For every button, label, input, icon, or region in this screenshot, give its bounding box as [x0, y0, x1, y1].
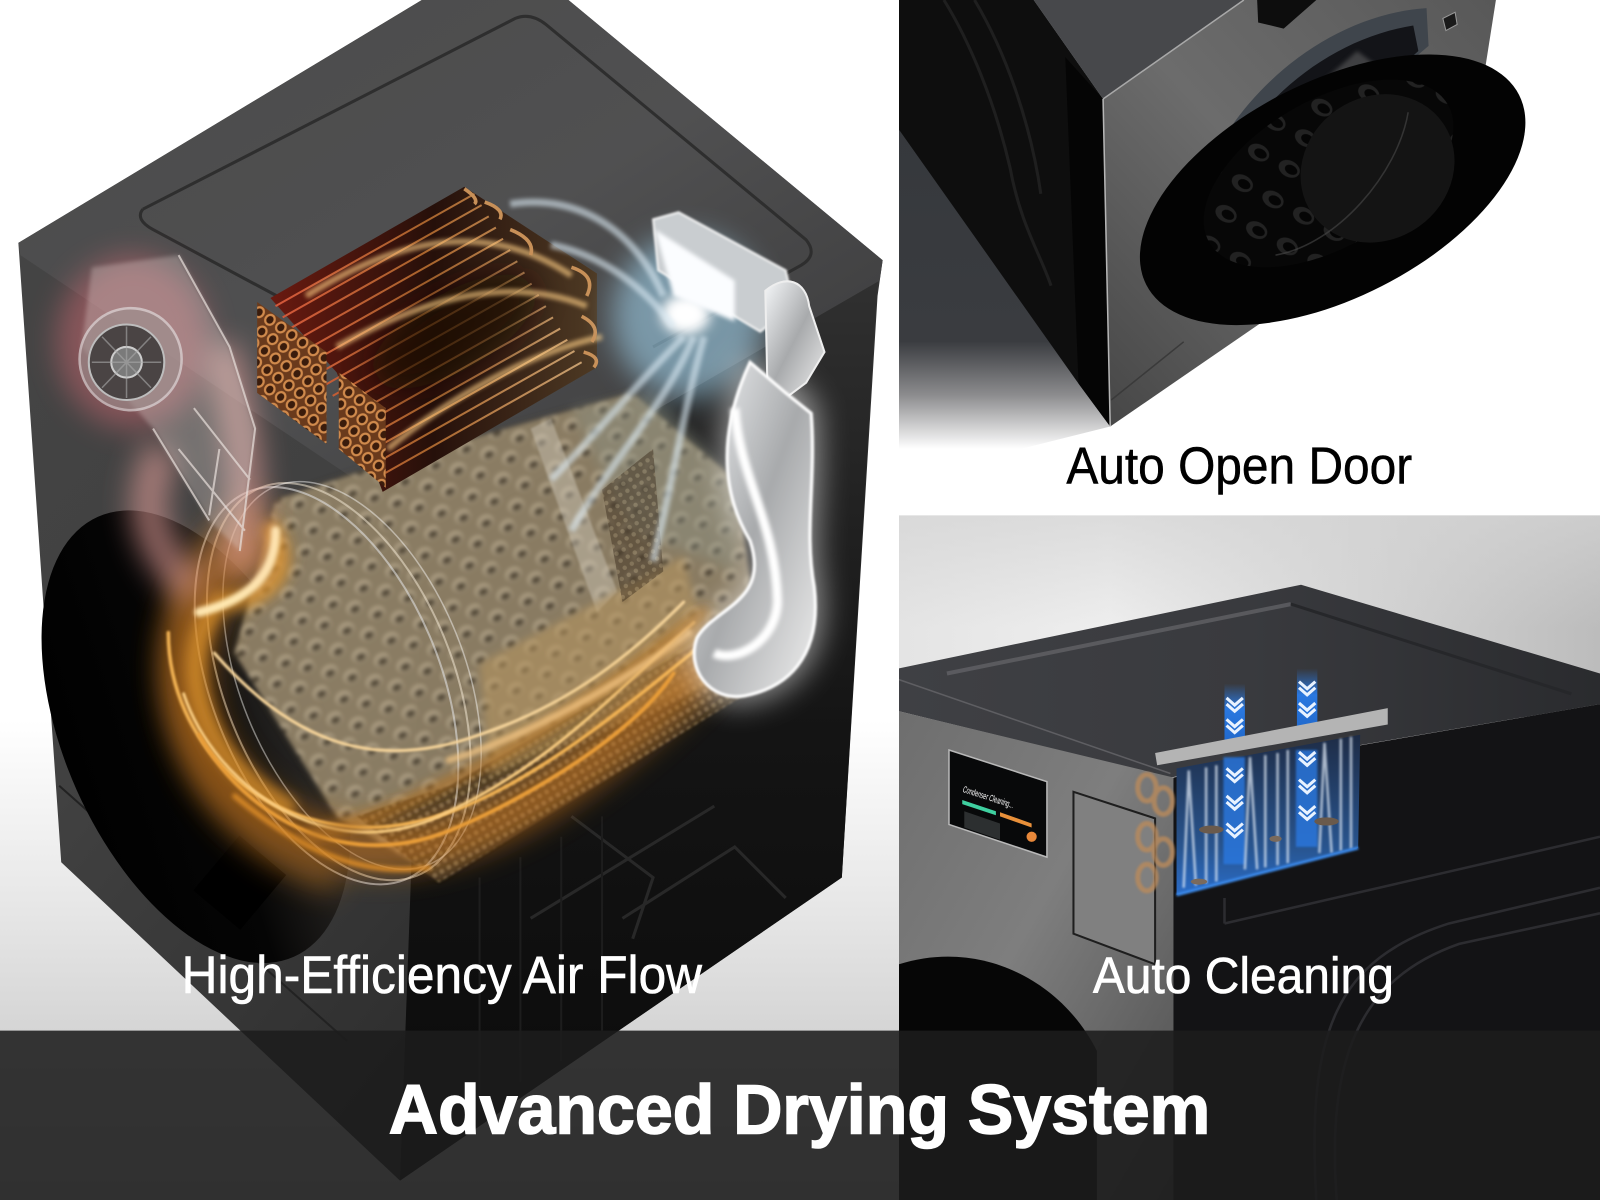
- silver nozzle and duct: [653, 212, 824, 704]
- open door: [1140, 54, 1526, 326]
- heat exchanger: [257, 187, 602, 492]
- pink heated air glow: [56, 255, 255, 592]
- cool air streams: [510, 202, 765, 561]
- title: Advanced Drying System: [389, 1071, 1210, 1149]
- water cleaning box: [1177, 735, 1360, 895]
- service hatch: [1073, 792, 1155, 964]
- door opening and drum: [1233, 8, 1428, 124]
- washer door: [42, 510, 350, 963]
- spray bar: [1155, 708, 1388, 765]
- blue downward arrows: [1224, 668, 1317, 837]
- label: auto open door: Auto Open Door: [1066, 438, 1412, 496]
- touch screen display: Condenser Cleaning...: [962, 784, 1015, 810]
- machine side face: [899, 0, 1110, 449]
- condenser coils: [1138, 774, 1172, 891]
- panel: high-efficiency air flow: [0, 0, 899, 1200]
- title band: [0, 1031, 1600, 1200]
- drum: [194, 392, 752, 886]
- icon: fan: [80, 308, 182, 410]
- machine body cutaway: [18, 0, 883, 1181]
- label: high-efficiency air flow: High-Efficiency Air Flow: [182, 946, 703, 1005]
- label: auto cleaning: Auto Cleaning: [1093, 947, 1394, 1004]
- machine body: [899, 585, 1600, 1200]
- machine top and front faces: [1034, 0, 1496, 427]
- touch screen display: [949, 750, 1047, 857]
- warm air swirl: [168, 510, 714, 878]
- panel: auto cleaning: [899, 515, 1600, 1200]
- panel: auto open door: [899, 0, 1526, 495]
